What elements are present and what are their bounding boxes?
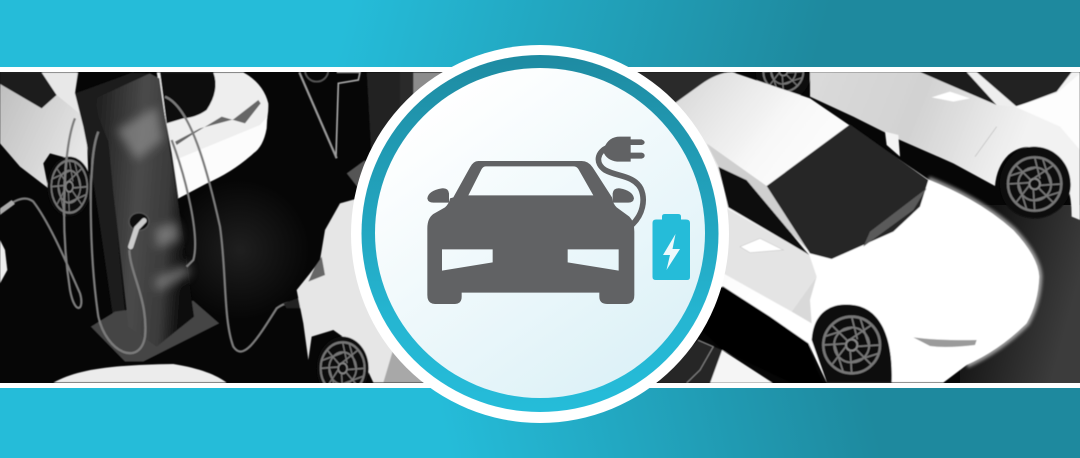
plug	[604, 137, 645, 162]
left edge car	[0, 240, 7, 283]
photo strip: electric cars charging	[0, 72, 1080, 383]
fender shading	[792, 277, 817, 323]
right mirror	[613, 188, 634, 203]
car body	[427, 161, 634, 304]
rear white car	[157, 72, 268, 198]
large white car	[670, 72, 1039, 383]
windscreen	[767, 124, 928, 259]
right-hand white car behind badge	[296, 198, 424, 383]
teal ring	[362, 55, 718, 412]
door panel	[723, 207, 817, 312]
inner disc	[375, 68, 705, 398]
base plate	[91, 301, 219, 362]
bottom car	[658, 340, 773, 383]
charging cable	[598, 147, 643, 225]
post highlights	[117, 107, 190, 292]
white outer circle	[351, 45, 729, 423]
top teal band	[0, 0, 1080, 67]
icon: battery with lightning bolt	[652, 214, 690, 280]
bottom teal band	[0, 388, 1080, 458]
icon: electric car	[427, 137, 645, 304]
white photo borders	[0, 67, 1080, 388]
left part of photo	[0, 58, 443, 400]
plug on right-hand car	[283, 298, 301, 309]
upper right car	[810, 72, 1080, 220]
roof pillar strip	[707, 143, 812, 254]
connector port	[129, 213, 149, 231]
dark car behind roof	[630, 72, 737, 110]
photo background floor	[0, 72, 1080, 383]
background chargers	[298, 72, 442, 188]
left mirror	[427, 188, 449, 203]
central badge	[351, 45, 729, 423]
right part of photo	[630, 46, 1080, 383]
lower black gap	[722, 286, 813, 356]
small plug left	[0, 200, 15, 215]
side of left white car	[0, 72, 91, 217]
mirror	[740, 238, 783, 253]
cables	[0, 97, 300, 353]
charging post back	[75, 73, 150, 327]
front wheel	[812, 304, 892, 383]
side window	[718, 167, 809, 255]
glow around hood	[928, 179, 1039, 365]
floor glow centre-left	[192, 203, 287, 298]
bottom white car	[53, 364, 227, 383]
floor glow right	[960, 205, 1080, 383]
headlight	[913, 337, 977, 347]
handle	[131, 221, 144, 247]
charging post	[95, 73, 194, 347]
back wheel top	[756, 72, 811, 96]
